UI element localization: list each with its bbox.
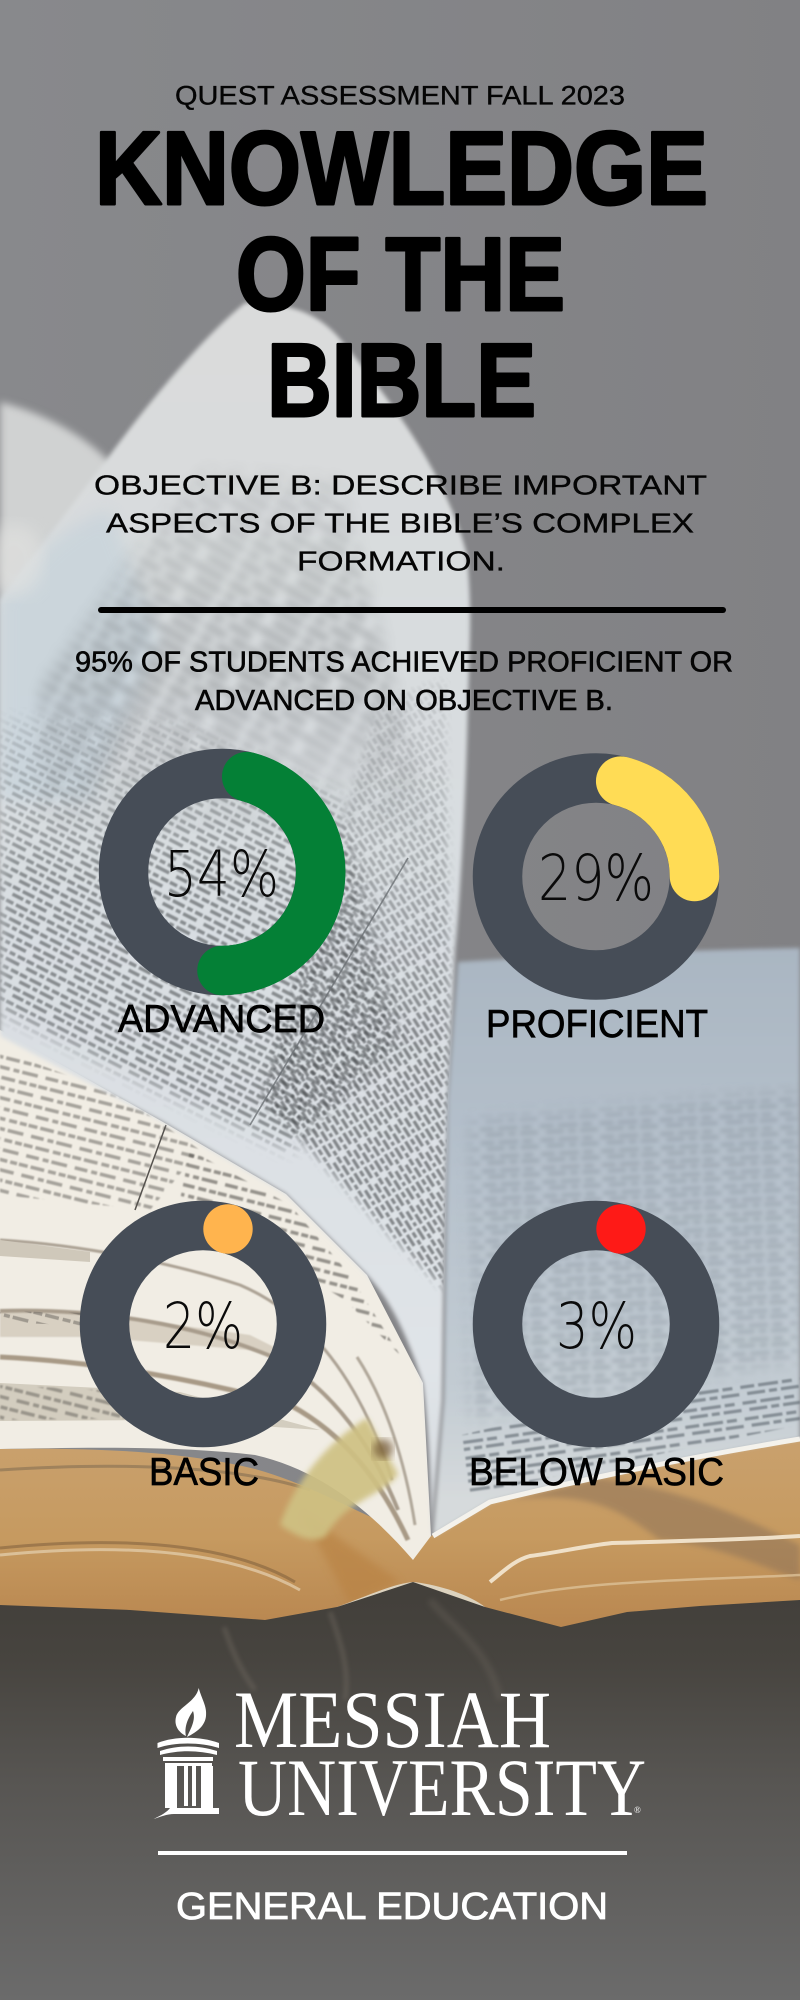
footer: general education: GENERAL EDUCATION	[176, 1886, 608, 1928]
logo: Messiah University: MESSIAH	[234, 1674, 551, 1765]
footer divider	[158, 1851, 627, 1855]
title: OF THE	[236, 217, 565, 333]
donut: basic 2%: BASIC	[149, 1451, 259, 1494]
logo: Messiah University: UNIVERSITY	[238, 1742, 646, 1833]
donut: proficient 29%: 29%	[538, 842, 654, 915]
donut: advanced 54%: ADVANCED	[118, 998, 325, 1041]
cream page with printed columns	[0, 1050, 400, 1355]
objective text	[94, 470, 707, 576]
donut: below basic 3%: 3%	[556, 1290, 637, 1363]
donut: below basic 3%	[469, 1204, 724, 1494]
stacked pages	[0, 1030, 431, 1560]
right page	[433, 948, 800, 1536]
summary statement: ADVANCED ON OBJECTIVE B.	[195, 685, 613, 717]
logo: Messiah University: ®	[634, 1805, 641, 1815]
donut: proficient 29%	[486, 778, 708, 1046]
cover spine	[0, 1582, 800, 2000]
back left page	[0, 402, 240, 880]
title	[95, 111, 708, 439]
donut: basic 2%	[104, 1204, 302, 1494]
donut: advanced 54%: 54%	[164, 838, 279, 911]
header: quest assessment: QUEST ASSESSMENT FALL 2023	[175, 80, 625, 110]
donut: proficient 29%: PROFICIENT	[486, 1003, 708, 1046]
summary statement	[75, 646, 733, 717]
donut: advanced 54%	[118, 774, 325, 1041]
title: KNOWLEDGE	[95, 111, 708, 227]
book page edges: gold	[0, 1439, 800, 1640]
summary statement: 95% OF STUDENTS ACHIEVED PROFICIENT OR	[75, 646, 733, 678]
objective text: FORMATION.	[297, 546, 505, 576]
donut: below basic 3%: BELOW BASIC	[469, 1451, 724, 1494]
objective text: OBJECTIVE B: DESCRIBE IMPORTANT	[94, 470, 707, 500]
bookmark ribbon	[280, 1418, 398, 1540]
donut: basic 2%: 2%	[163, 1290, 243, 1363]
logo: Messiah University	[154, 1674, 646, 1833]
icon: flame and column	[154, 1688, 219, 1819]
objective text: ASPECTS OF THE BIBLE’S COMPLEX	[106, 508, 694, 538]
divider line	[98, 607, 726, 613]
main curling page	[0, 303, 480, 1536]
title: BIBLE	[267, 323, 536, 439]
